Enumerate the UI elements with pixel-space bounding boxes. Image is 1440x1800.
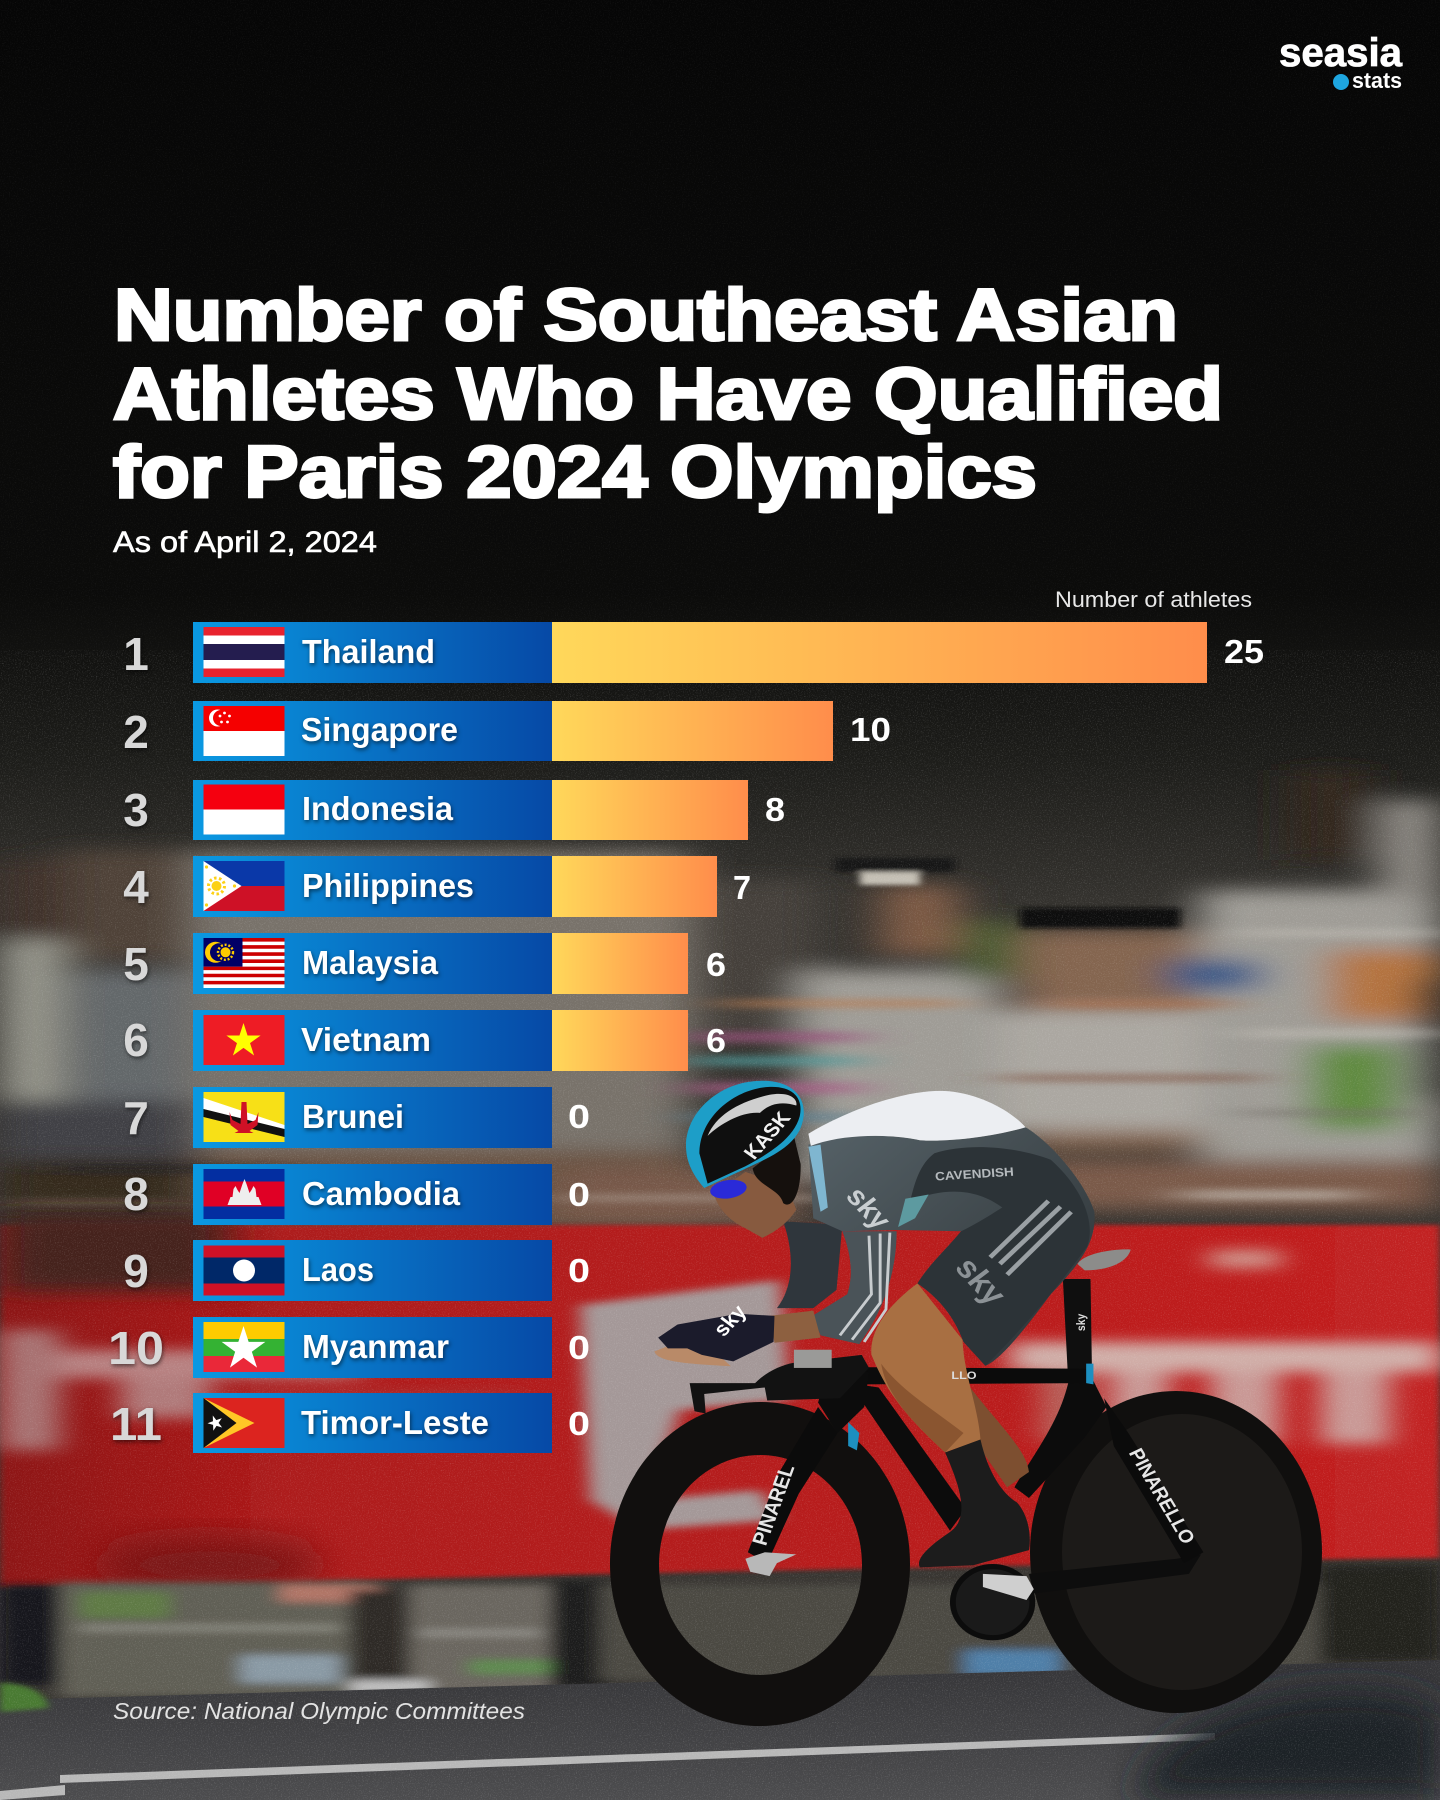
value: 0 xyxy=(568,1252,590,1289)
seatpost xyxy=(1063,1279,1092,1372)
country bar xyxy=(193,1164,552,1225)
name: Laos xyxy=(302,1251,374,1288)
name: Singapore xyxy=(301,711,458,748)
flag: Indonesia xyxy=(204,784,284,834)
flag: Malaysia xyxy=(204,938,284,988)
value: 6 xyxy=(706,946,726,983)
crowd streaks xyxy=(10,930,1440,1206)
rank 11: 11 xyxy=(110,1398,162,1450)
country bar xyxy=(193,780,552,840)
row: Singapore xyxy=(123,701,891,761)
flag: Thailand xyxy=(204,627,284,677)
film grain lower xyxy=(0,650,1440,1800)
rank 9: 9 xyxy=(123,1245,149,1297)
aero bars xyxy=(690,1355,869,1413)
source note: Source: National Olympic Committees xyxy=(113,1698,526,1724)
shorts shade xyxy=(910,1147,1090,1366)
chainring xyxy=(953,1567,1032,1638)
calf shade xyxy=(881,1364,964,1452)
name: Vietnam xyxy=(301,1021,431,1058)
foreground blur blob xyxy=(1130,1690,1440,1800)
country bar xyxy=(193,856,552,917)
helmet black xyxy=(699,1087,801,1184)
title: Athletes Who Have Qualified xyxy=(113,354,1223,435)
front hub xyxy=(745,1552,796,1576)
country bar xyxy=(193,701,552,761)
helmet logo: KASK xyxy=(740,1108,796,1164)
rank 5: 5 xyxy=(123,938,149,990)
sock and shoe xyxy=(919,1439,1030,1567)
name: Thailand xyxy=(302,633,435,670)
row: Indonesia xyxy=(123,780,785,840)
flag: Cambodia xyxy=(204,1169,284,1219)
row: Vietnam xyxy=(123,1010,726,1071)
logo: seasia stats xyxy=(1279,31,1403,93)
title: for Paris 2024 Olympics xyxy=(113,432,1037,513)
leg stripes xyxy=(990,1201,1071,1275)
subtitle: As of April 2, 2024 xyxy=(113,526,377,559)
jersey panel xyxy=(898,1194,929,1227)
value: 8 xyxy=(765,791,785,828)
logo wordmark: seasia xyxy=(1279,31,1403,75)
rank 4: 4 xyxy=(123,861,149,913)
country bar xyxy=(193,1010,552,1071)
flag: Philippines xyxy=(204,861,284,911)
name: Philippines xyxy=(302,867,474,904)
value bar xyxy=(552,780,748,840)
road line xyxy=(0,1733,1215,1800)
head tube xyxy=(818,1364,869,1433)
down tube xyxy=(850,1383,966,1531)
name: Myanmar xyxy=(302,1328,449,1365)
seatpost logo: sky xyxy=(1076,1313,1088,1331)
fingers xyxy=(654,1344,731,1366)
glove logo: sky xyxy=(709,1301,752,1341)
country bar xyxy=(193,1240,552,1301)
seat stay xyxy=(1104,1398,1203,1563)
forearm xyxy=(770,1311,821,1343)
value bar xyxy=(552,1010,688,1071)
row: Laos xyxy=(123,1240,590,1301)
fork xyxy=(748,1407,838,1563)
rank 6: 6 xyxy=(123,1014,149,1066)
rank 10: 10 xyxy=(108,1322,164,1374)
value: 7 xyxy=(733,869,751,906)
jersey logo: sky xyxy=(839,1181,897,1235)
roadside blur xyxy=(0,1565,1440,1698)
value bar xyxy=(552,933,688,994)
helmet highlight xyxy=(708,1094,797,1136)
value bar xyxy=(552,856,717,917)
far leg xyxy=(901,1385,1029,1487)
name: Cambodia xyxy=(302,1175,461,1212)
rank 7: 7 xyxy=(123,1092,149,1144)
glove xyxy=(658,1314,774,1361)
grass xyxy=(0,1683,48,1712)
country bar xyxy=(193,933,552,994)
front wheel xyxy=(610,1402,910,1726)
seat stay logo: PINARELLO xyxy=(1124,1445,1198,1548)
row: Brunei xyxy=(123,1087,590,1148)
name: Timor-Leste xyxy=(301,1404,489,1441)
country bar xyxy=(193,622,552,683)
row: Philippines xyxy=(123,856,751,917)
title xyxy=(113,275,1223,513)
country bar xyxy=(193,1087,552,1148)
name: Indonesia xyxy=(302,790,454,827)
value bar xyxy=(552,701,833,761)
film grain upper xyxy=(0,0,1440,650)
value: 10 xyxy=(850,711,891,748)
crowd blur xyxy=(0,770,1440,1230)
title: Number of Southeast Asian xyxy=(114,275,1178,356)
hair xyxy=(753,1136,801,1205)
name: Brunei xyxy=(302,1098,404,1135)
road xyxy=(0,1660,1440,1800)
chain stay xyxy=(1029,1554,1201,1593)
logo dot xyxy=(1333,74,1349,90)
rear wheel xyxy=(1030,1391,1322,1713)
stem xyxy=(794,1350,832,1368)
red banner xyxy=(0,1225,1440,1588)
value: 25 xyxy=(1224,633,1264,670)
collar trim xyxy=(808,1145,828,1212)
crowd details xyxy=(835,858,1180,928)
row: Malaysia xyxy=(123,933,726,994)
row: Timor-Leste xyxy=(110,1393,590,1453)
value bar xyxy=(552,622,1207,683)
rank 8: 8 xyxy=(123,1168,149,1220)
shorts logo: sky xyxy=(948,1251,1014,1311)
country bar xyxy=(193,1317,552,1378)
axis label: Number of athletes xyxy=(1055,587,1252,612)
sleeve stripes xyxy=(840,1233,890,1342)
banner grey block xyxy=(580,1280,790,1530)
value: 6 xyxy=(706,1022,726,1059)
rank 2: 2 xyxy=(123,706,149,758)
blue cable stop xyxy=(848,1364,1093,1450)
flag: Timor-Leste xyxy=(204,1398,284,1448)
fork logo: PINAREL xyxy=(749,1462,800,1548)
logo sub-word: stats xyxy=(1352,68,1402,93)
face xyxy=(714,1172,796,1238)
white shoulders xyxy=(808,1091,1026,1146)
flag: Singapore xyxy=(204,706,284,756)
row: Myanmar xyxy=(108,1317,590,1378)
crank xyxy=(983,1574,1034,1600)
value: 0 xyxy=(568,1329,590,1366)
seat tube xyxy=(1014,1379,1107,1498)
flag: Laos xyxy=(204,1246,284,1296)
country bar xyxy=(193,1393,552,1453)
helmet shell xyxy=(686,1081,804,1188)
value: 0 xyxy=(568,1098,590,1135)
row: Cambodia xyxy=(123,1164,590,1225)
flag: Myanmar xyxy=(204,1322,284,1372)
value: 0 xyxy=(568,1405,590,1442)
rear wheel disc xyxy=(1062,1414,1302,1690)
name: Malaysia xyxy=(302,944,439,981)
value: 0 xyxy=(568,1176,590,1213)
frame logo: LLO xyxy=(951,1368,977,1382)
rank 3: 3 xyxy=(123,784,149,836)
row: Thailand xyxy=(123,622,1264,683)
banner dark blob xyxy=(95,1539,325,1591)
name print: CAVENDISH xyxy=(935,1164,1014,1183)
rank 1: 1 xyxy=(123,628,149,680)
flag: Vietnam xyxy=(204,1015,284,1065)
banner lettering blur xyxy=(0,1250,1440,1450)
rider and frame xyxy=(654,1081,1203,1638)
near thigh and shin xyxy=(871,1283,980,1452)
flag: Brunei xyxy=(204,1092,284,1142)
banner top-left shade xyxy=(0,1212,230,1292)
top tube xyxy=(838,1367,1091,1384)
icon: cyclist on time trial bike xyxy=(610,1081,1322,1726)
back arm xyxy=(777,1221,842,1308)
sleeve xyxy=(812,1231,897,1344)
torso and shorts xyxy=(808,1127,1095,1366)
visor xyxy=(709,1177,748,1201)
saddle xyxy=(1077,1249,1131,1270)
